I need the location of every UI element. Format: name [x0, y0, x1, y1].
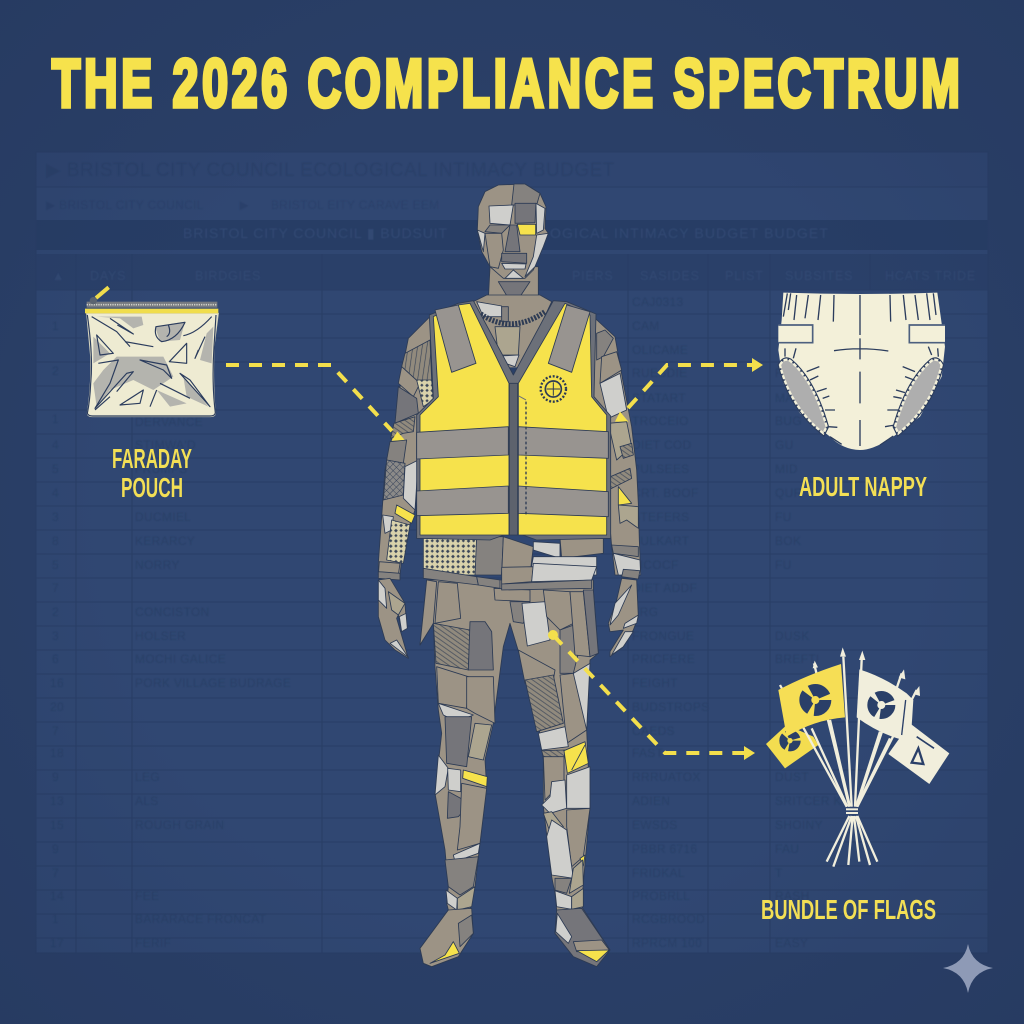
vest emblem: [541, 376, 566, 402]
spreadsheet item names: FEE: [135, 889, 159, 903]
spreadsheet row numbers: 20: [50, 700, 64, 714]
pole ends: [827, 816, 877, 867]
spreadsheet row numbers: 7: [52, 866, 59, 880]
bundle tie: [846, 808, 858, 814]
spreadsheet supplier column: DIET ADDF: [632, 581, 697, 595]
spreadsheet column headers: [52, 269, 976, 283]
nappy body: [778, 293, 945, 450]
spreadsheet item names: NORRY: [135, 558, 180, 572]
label: adult nappy: ADULT NAPPY: [799, 471, 927, 502]
spreadsheet row numbers: 5: [52, 462, 59, 476]
spreadsheet row numbers: 9: [52, 770, 59, 784]
panel: faint spreadsheet backdrop: [36, 152, 988, 953]
figure: patchwork man: [378, 184, 641, 967]
spreadsheet supplier column: CAM: [632, 319, 660, 333]
spreadsheet row numbers: 7: [52, 581, 59, 595]
front white flag: [857, 669, 913, 742]
spreadsheet supplier column: CAEDS: [632, 724, 675, 738]
left foot: [420, 908, 473, 967]
spreadsheet supplier column: STATART: [632, 391, 686, 405]
spreadsheet status column: FAU: [775, 842, 799, 856]
spreadsheet status column: FU: [775, 510, 792, 524]
spreadsheet status column: SHOINY: [775, 818, 823, 832]
spreadsheet status column: RASH: [775, 889, 810, 903]
pouch camouflage patches: [93, 317, 213, 407]
spreadsheet status column: MID: [775, 462, 798, 476]
spreadsheet title: ▶ BRISTOL CITY COUNCIL ECOLOGICAL INTIMACY BUDGET: [46, 160, 615, 181]
spreadsheet item names: CONCISTON: [135, 605, 209, 619]
spreadsheet status column: BOK: [775, 534, 801, 548]
spreadsheet item names: HOLSER: [135, 629, 186, 643]
spreadsheet supplier column: TICOCF: [632, 558, 678, 572]
label: bundle of flags: BUNDLE OF FLAGS: [761, 894, 936, 925]
spreadsheet row numbers: 17: [50, 936, 64, 950]
lower body: [378, 563, 640, 967]
spreadsheet supplier column: FAST: [632, 746, 664, 760]
spreadsheet item names: LEG: [135, 770, 160, 784]
legs silhouette: [420, 580, 610, 967]
vest shoulder strips: [435, 305, 476, 372]
spreadsheet status column: DUST: [775, 770, 809, 784]
flag poles: [780, 657, 917, 807]
spreadsheet status column: T: [775, 866, 783, 880]
spreadsheet status column: MA: [775, 391, 794, 405]
spreadsheet column headers: SASIDES: [640, 269, 700, 283]
spreadsheet item names: FERIF: [135, 936, 171, 950]
spreadsheet supplier column: FRG: [632, 605, 658, 619]
spreadsheet item names: DUCMIEL: [135, 510, 191, 524]
nappy tabs: [778, 325, 945, 343]
right hand: [608, 569, 640, 657]
spreadsheet row numbers: 6: [52, 652, 59, 666]
spreadsheet item names: STIMWA'D: [135, 438, 196, 452]
spreadsheet row numbers: [50, 319, 64, 950]
spreadsheet supplier column: RPRCM 100: [632, 936, 702, 950]
spreadsheet supplier column: RCGBROOD: [632, 912, 705, 926]
neck: [488, 267, 538, 307]
spreadsheet row numbers: 1: [52, 319, 59, 333]
spreadsheet supplier column: FEIGHT: [632, 676, 678, 690]
spreadsheet supplier column: RRRUATOX: [632, 770, 701, 784]
spreadsheet supplier column: PROBRLL: [632, 889, 690, 903]
spreadsheet supplier column: [632, 295, 709, 950]
hips and belt: [420, 563, 598, 673]
icon: bundle of flags: [766, 647, 949, 867]
spreadsheet column headers: DAYS: [90, 269, 126, 283]
spreadsheet supplier column: BUDSTROPS: [632, 700, 709, 714]
spreadsheet row numbers: 8: [52, 534, 59, 548]
nappy right leg opening: [895, 360, 942, 433]
label: pouch second line: POUCH: [121, 472, 183, 503]
spreadsheet row numbers: 3: [52, 629, 59, 643]
right arm: [593, 317, 641, 575]
pole tips: [813, 647, 920, 696]
pouch body: [87, 313, 218, 417]
spreadsheet status column: QUR: [775, 486, 803, 500]
spreadsheet item names: DERVANCE: [135, 415, 203, 429]
spreadsheet item names: MOCHI GALICE: [135, 652, 226, 666]
head: [477, 184, 548, 278]
spreadsheet row numbers: 4: [52, 486, 59, 500]
spreadsheet supplier column: OLICAME: [632, 343, 688, 357]
spreadsheet row numbers: 5: [52, 558, 59, 572]
left leg patches: [433, 622, 495, 910]
spreadsheet supplier column: RUESDIE: [632, 366, 687, 380]
spreadsheet column headers: PLIST: [725, 269, 764, 283]
spreadsheet supplier column: CRT. BOOF: [632, 486, 698, 500]
left hand: [378, 572, 408, 658]
vest right panel: [518, 303, 607, 535]
spreadsheet row numbers: 2: [52, 605, 59, 619]
spreadsheet status column: EASY: [775, 936, 808, 950]
nappy left leg opening: [780, 360, 827, 433]
spreadsheet row numbers: 7: [52, 724, 59, 738]
spreadsheet item names: [135, 415, 291, 950]
spreadsheet status column: SRITCER KT: [775, 794, 850, 808]
chest under vest: [473, 295, 552, 383]
spreadsheet column headers: SUBSITES: [785, 269, 853, 283]
spreadsheet row numbers: 16: [50, 676, 64, 690]
spreadsheet supplier column: CAJ0313: [632, 295, 683, 309]
spreadsheet status column: BREFTI: [775, 652, 819, 666]
label: faraday pouch: FARADAY: [112, 443, 192, 474]
spreadsheet status column: [775, 366, 850, 950]
spreadsheet status column: DUSK: [775, 629, 810, 643]
icon: sparkle: [943, 944, 993, 993]
spreadsheet item names: FRUMPS: [135, 462, 187, 476]
torso below vest: [423, 537, 603, 575]
vest left panel: [420, 303, 509, 535]
spreadsheet row numbers: 15: [50, 818, 64, 832]
icon: faraday pouch: [85, 287, 218, 417]
spreadsheet row numbers: 14: [50, 889, 64, 903]
spreadsheet supplier column: FRONGUE: [632, 629, 694, 643]
spreadsheet item names: ROUGH GRAIN: [135, 818, 224, 832]
connector: figure to nappy: [628, 358, 763, 408]
spreadsheet band heading: BRISTOL CITY COUNCIL ▮ BUDSUIT: [183, 225, 448, 241]
spreadsheet supplier column: BULKART: [632, 534, 690, 548]
spreadsheet band heading, right part: OGICAL INTIMACY BUDGET BUDGET: [550, 225, 829, 241]
connector: pouch to figure: [226, 365, 392, 431]
connector: figure to flags: [548, 630, 755, 760]
back right flag: [888, 723, 949, 784]
spreadsheet column headers: BIRDGIES: [195, 269, 261, 283]
spreadsheet column headers: ▲: [52, 269, 65, 283]
icon: adult nappy: [778, 293, 945, 450]
spreadsheet row numbers: 18: [50, 746, 64, 760]
spreadsheet supplier column: ADIEN: [632, 794, 670, 808]
spreadsheet item names: BARARACE FRONCAT: [135, 912, 267, 926]
back left flag: [766, 725, 818, 768]
spreadsheet status column: GU: [775, 438, 794, 452]
vest reflective bands: [417, 427, 508, 459]
spreadsheet supplier column: EWSDS: [632, 818, 678, 832]
spreadsheet item names: KERARCY: [135, 534, 195, 548]
pouch zipper: [87, 302, 217, 308]
spreadsheet supplier column: DIET COD: [632, 438, 692, 452]
spreadsheet row numbers: 3: [52, 510, 59, 524]
spreadsheet row numbers: 13: [50, 794, 64, 808]
spreadsheet status column: FU: [775, 558, 792, 572]
spreadsheet status column: FU: [775, 366, 792, 380]
spreadsheet item names: ALS: [135, 794, 159, 808]
spreadsheet column headers: HCATS TRIDE: [885, 269, 976, 283]
spreadsheet row numbers: 1: [52, 912, 59, 926]
spreadsheet row numbers: 1: [52, 412, 59, 426]
pouch creases: [87, 315, 216, 416]
front yellow flag: [778, 664, 845, 737]
spreadsheet status column: BUG: [775, 414, 802, 428]
vest: [417, 301, 611, 540]
spreadsheet supplier column: TROCEIO: [632, 414, 689, 428]
spreadsheet column headers: PIERS: [572, 269, 614, 283]
upper body: [378, 184, 641, 575]
vest placket: [509, 383, 518, 535]
spreadsheet sub heading: ▶ BRISTOL CITY COUNCIL ▶ BRISTOL EITY CARAVE EEM: [46, 198, 439, 212]
spreadsheet supplier column: PRICFERE: [632, 652, 695, 666]
spreadsheet item names: PORK VILLAGE BUDRAGE: [135, 676, 291, 690]
spreadsheet supplier column: STEFERS: [632, 510, 689, 524]
spreadsheet supplier column: PBBR 6716: [632, 842, 697, 856]
spreadsheet supplier column: FRIDKAL: [632, 866, 685, 880]
title: THE 2026 COMPLIANCE SPECTRUM: [52, 46, 960, 122]
right leg patches: [518, 650, 590, 909]
left arm: [378, 315, 433, 575]
spreadsheet row numbers: 9: [52, 842, 59, 856]
spreadsheet row numbers: 2: [52, 364, 59, 378]
spreadsheet supplier column: PULSEES: [632, 462, 689, 476]
spreadsheet row numbers: 4: [52, 438, 59, 452]
nappy waistband pleats: [783, 293, 938, 446]
right foot: [555, 908, 610, 967]
